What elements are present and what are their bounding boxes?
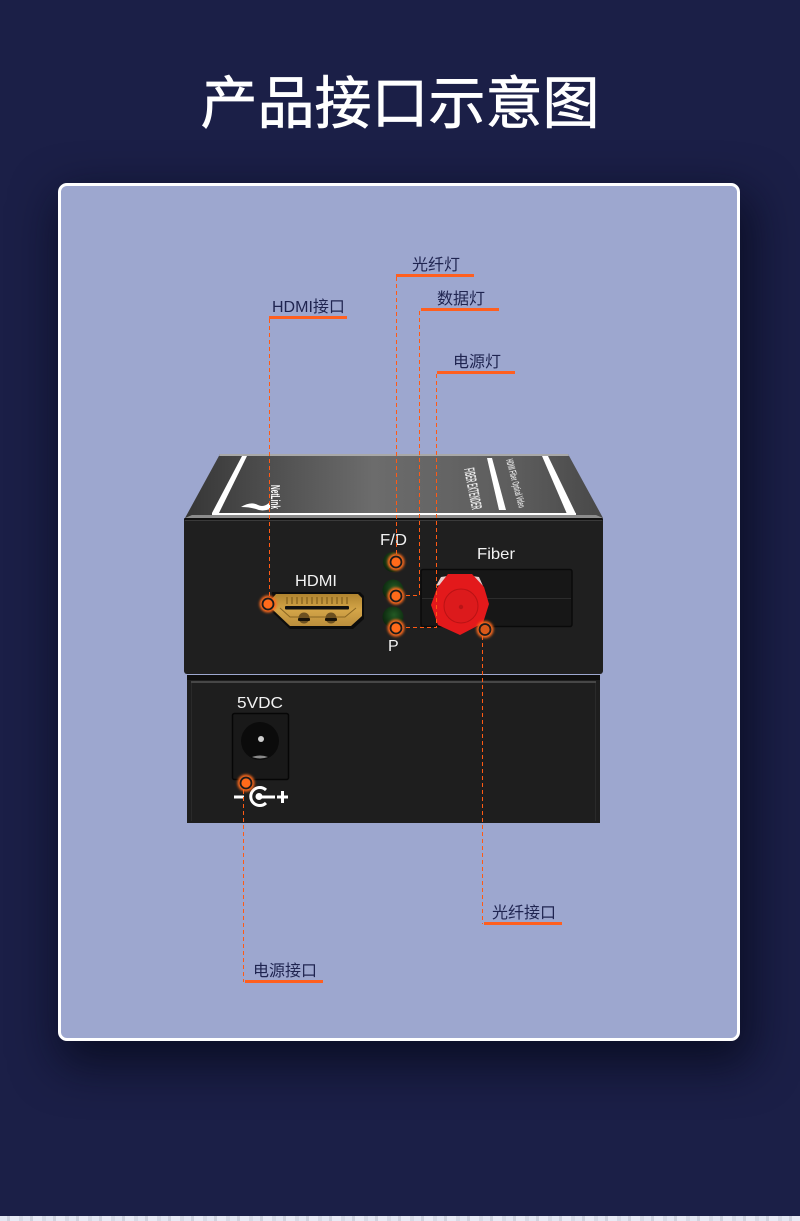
rear panel body <box>187 675 600 823</box>
HDMI port <box>270 592 364 629</box>
device top face: HDMI Fiber Optical Video <box>503 458 527 509</box>
leader: power port <box>242 790 244 982</box>
title: 产品接口示意图 <box>200 72 600 136</box>
HDMI label: HDMI <box>295 573 337 590</box>
brand logo on lid: NetLink <box>268 485 283 509</box>
callout: fibre port: 光纤接口 <box>492 904 556 922</box>
fibre LED <box>383 552 403 572</box>
5VDC label: 5VDC <box>237 695 283 712</box>
P label: P <box>388 638 399 655</box>
power LED <box>382 606 404 628</box>
data LED <box>382 580 404 600</box>
marker: fibre port <box>476 621 494 638</box>
bottom decorative strip <box>0 1216 800 1221</box>
callout: power light: 电源灯 <box>453 353 501 371</box>
device: fiber HDMI transmitter box <box>184 454 603 674</box>
leader: HDMI <box>268 319 270 598</box>
Fiber label: Fiber <box>477 546 516 563</box>
F/D label: F/D <box>380 532 407 549</box>
callout: HDMI port: HDMI接口 <box>272 298 345 316</box>
device: fiber HDMI transmitter box: FIBER EXTENDER <box>460 467 485 511</box>
callout: power light <box>437 353 515 374</box>
callout: fibre port <box>484 904 562 925</box>
leader: fibre port <box>482 636 484 924</box>
marker: data LED <box>388 588 404 604</box>
callout: fibre light: 光纤灯 <box>412 256 460 274</box>
marker: power port <box>238 774 254 792</box>
marker: fibre LED <box>388 554 404 570</box>
red fiber connector <box>431 574 489 635</box>
power jack <box>232 714 288 780</box>
panel: product interface diagram <box>58 183 740 1041</box>
callout: power port <box>245 962 323 983</box>
leader: fibre LED <box>396 277 398 556</box>
device: rear power unit <box>187 675 600 823</box>
callout: fibre light <box>396 256 474 277</box>
callout: data light <box>421 290 499 311</box>
polarity symbol <box>234 788 288 806</box>
marker: power LED <box>388 620 404 636</box>
fiber port window <box>421 570 572 626</box>
marker: HDMI port <box>260 596 276 612</box>
device top face <box>185 454 603 518</box>
brand logo on lid <box>241 485 283 510</box>
leader: power LED <box>402 374 436 628</box>
leader: data LED <box>402 311 420 596</box>
callout: power port: 电源接口 <box>253 962 317 980</box>
device front face <box>184 518 603 674</box>
callout: data light: 数据灯 <box>437 290 485 308</box>
